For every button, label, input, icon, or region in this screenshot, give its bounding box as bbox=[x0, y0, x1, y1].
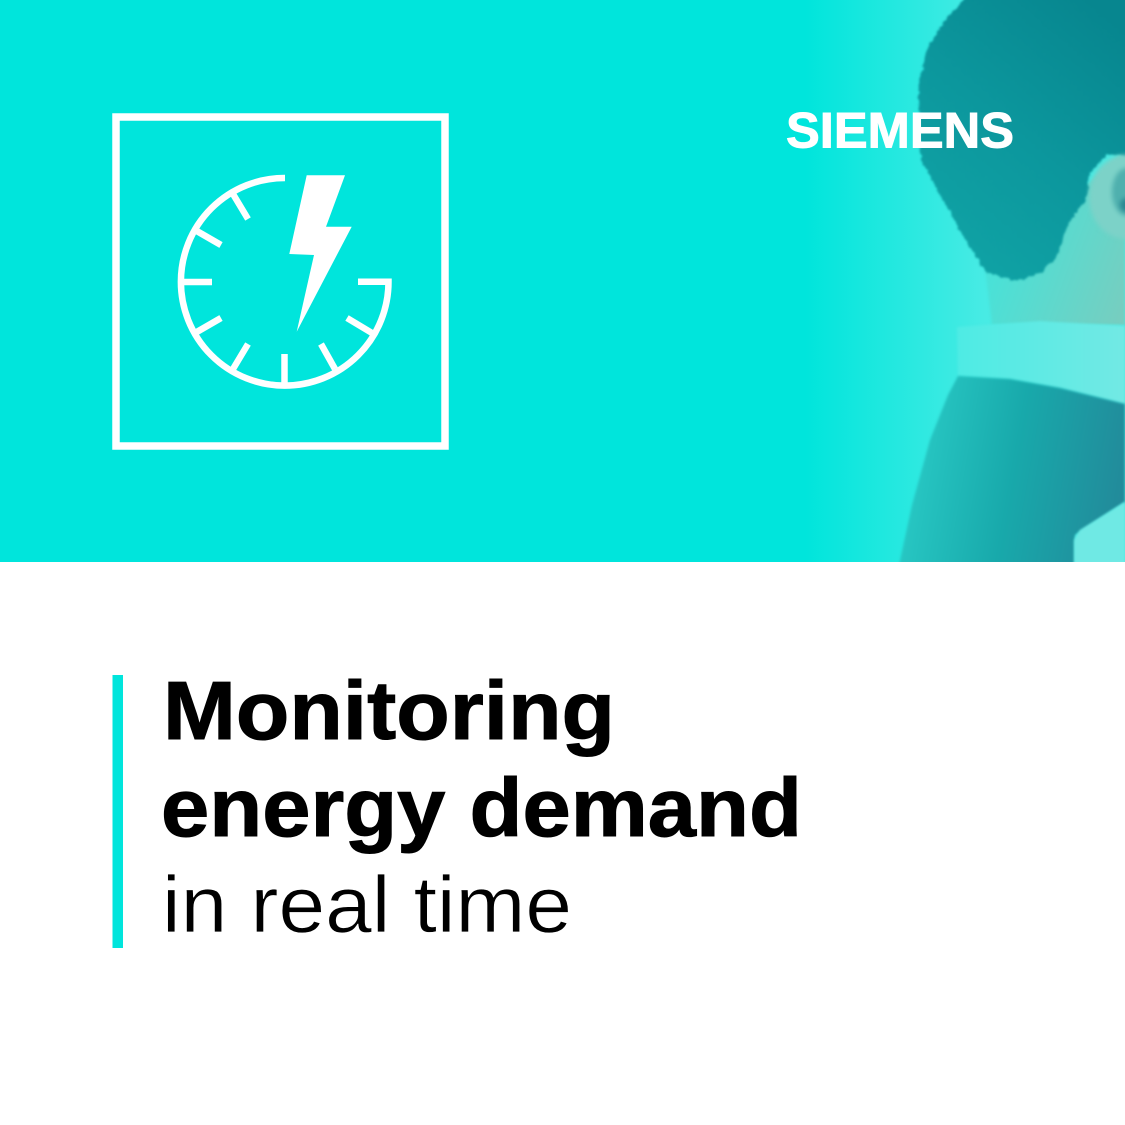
lightning bolt bbox=[289, 175, 352, 332]
heading line 3: in real time bbox=[162, 860, 572, 949]
hair bbox=[918, 0, 1125, 281]
accent bar bbox=[112, 675, 123, 948]
gauge arc bbox=[181, 178, 389, 386]
photo: person seen from behind bbox=[899, 0, 1125, 565]
icon frame: white square bbox=[116, 117, 445, 446]
icon: energy gauge with lightning bolt bbox=[181, 175, 389, 386]
ear bbox=[1089, 155, 1125, 239]
neck bbox=[986, 181, 1125, 326]
shirt highlight bbox=[1074, 502, 1125, 565]
logo: SIEMENS: SIEMENS bbox=[786, 102, 1014, 158]
panel: teal hero banner bbox=[0, 0, 1125, 565]
shirt bbox=[899, 376, 1125, 565]
heading line 2: energy demand bbox=[161, 761, 802, 854]
heading line 1: Monitoring bbox=[163, 664, 615, 757]
heading bbox=[161, 664, 802, 949]
gauge ticks bbox=[183, 194, 372, 383]
collar bbox=[957, 321, 1125, 404]
